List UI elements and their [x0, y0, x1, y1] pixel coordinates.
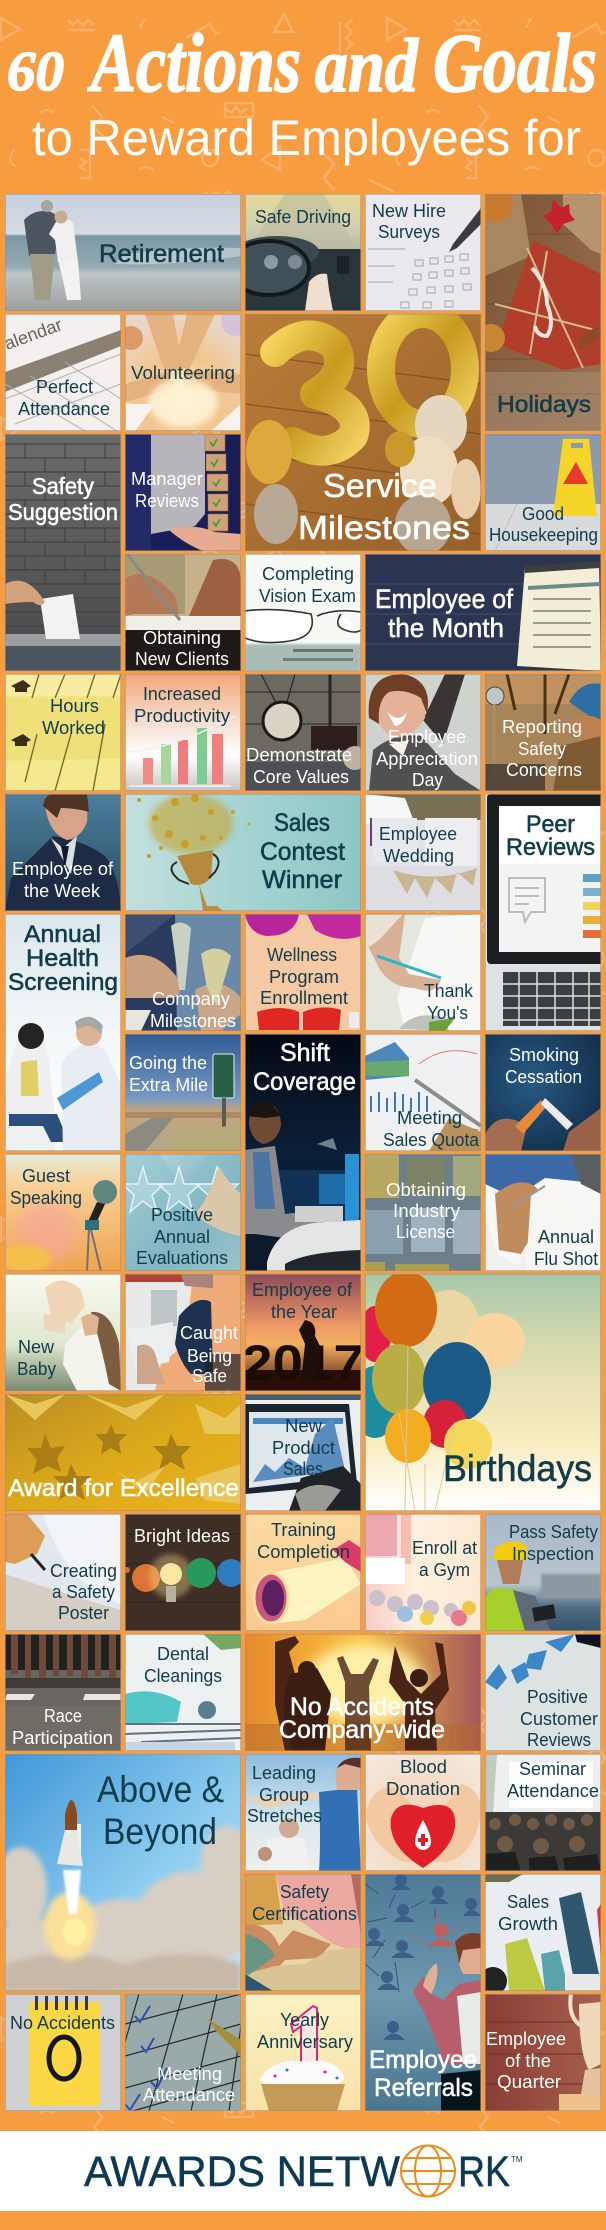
panel: Increased Productivity: Productivity — [134, 705, 231, 726]
panel: Perfect Attendance — [2, 314, 121, 431]
panel: Peer Reviews — [485, 794, 601, 1031]
panel: Completing Vision Exam — [245, 554, 361, 671]
panel: Positive Customer Reviews — [485, 1634, 601, 1751]
panel: Smoking Cessation — [485, 1034, 601, 1151]
panel: Employee of the Quarter: Employee — [486, 2028, 566, 2049]
panel: Meeting Attendance: Meeting — [157, 2063, 222, 2084]
panel: Yearly Anniversary: Anniversary — [257, 2031, 354, 2052]
panel: New Hire Surveys: Surveys — [378, 221, 440, 242]
panel: Annual Flu Shot — [485, 1154, 601, 1271]
panel: Race Participation: Participation — [12, 1727, 113, 1748]
panel: Safety Certifications: Safety — [280, 1881, 330, 1902]
panel: Guest Speaking: Guest — [22, 1165, 70, 1186]
panel: New Baby — [5, 1274, 121, 1391]
panel: Employee Wedding: Employee — [379, 823, 457, 844]
panel: Employee of the Quarter — [485, 1994, 601, 2111]
panel: Dental Cleanings: Dental — [157, 1643, 209, 1664]
panel: Thank You's: Thank — [424, 980, 474, 1001]
panel: Training Completion — [245, 1514, 361, 1631]
panel: Employee of the Month: the Month — [388, 613, 504, 643]
panel: Training Completion: Completion — [257, 1541, 350, 1562]
panel: Employee Appreciation Day — [365, 674, 481, 791]
panel: Sales Contest Winner: Contest — [260, 838, 345, 866]
panel: Employee Wedding: Wedding — [383, 845, 454, 866]
panel: Employee Wedding — [365, 794, 481, 911]
panel: Annual Health Screening: Health — [26, 945, 99, 972]
panel: Employee of the Week: the Week — [24, 880, 101, 901]
panel: Employee Referrals: Employee — [369, 2046, 477, 2074]
panel: Pass Safety Inspection: Pass Safety — [509, 1521, 599, 1542]
panel: Thank You's: You's — [427, 1002, 468, 1023]
panel: Seminar Attendance — [485, 1754, 601, 1871]
panel: Annual Health Screening — [5, 914, 121, 1151]
panel: Award for Excellence — [5, 1394, 241, 1511]
panel: Bright Ideas: Bright Ideas — [134, 1525, 230, 1546]
panel: Enroll at a Gym — [365, 1514, 481, 1631]
panel: Blood Donation — [365, 1754, 481, 1871]
panel: Holidays — [477, 186, 601, 431]
panel: Completing Vision Exam: Vision Exam — [259, 585, 356, 606]
panel: New Baby: Baby — [17, 1358, 57, 1379]
panel: Increased Productivity — [125, 674, 241, 791]
panel: Safe Driving — [229, 194, 361, 311]
panel: Obtaining Industry License: Obtaining — [386, 1179, 466, 1200]
panel: Peer Reviews: Reviews — [506, 834, 595, 861]
panel: Positive Annual Evaluations: Evaluations — [136, 1247, 228, 1268]
panel: Blood Donation: Blood — [400, 1756, 447, 1777]
footer: logo band — [0, 2131, 606, 2211]
panel: Above and Beyond — [0, 1754, 255, 1999]
panel: Caught Being Safe: Caught — [180, 1322, 238, 1343]
panel: Completing Vision Exam: Completing — [262, 563, 354, 584]
panel: Manager Reviews: Manager — [131, 468, 203, 489]
title: script line: Actions — [87, 17, 301, 110]
panel: Shift Coverage: Coverage — [253, 1068, 356, 1096]
panel: Obtaining Industry License: Industry — [393, 1200, 461, 1221]
panel: Creating a Safety Poster: a Safety — [52, 1581, 116, 1602]
panel: Volunteering: Volunteering — [131, 362, 235, 383]
panel: Demonstrate Core Values: Demonstrate — [246, 744, 352, 765]
panel: Positive Customer Reviews: Reviews — [527, 1729, 591, 1750]
panel: Wellness Program Enrollment — [245, 914, 361, 1031]
panel: Race Participation: Race — [44, 1705, 82, 1726]
panel: Sales Growth — [479, 1874, 601, 1995]
panel: Positive Customer Reviews: Positive — [527, 1686, 588, 1707]
panel: Employee of the Quarter: of the — [505, 2050, 551, 2071]
panel: Smoking Cessation: Cessation — [505, 1066, 582, 1087]
panel: New Product Sales — [245, 1394, 361, 1511]
panel: No Accidents — [5, 1994, 121, 2111]
panel: Annual Health Screening: Screening — [8, 969, 118, 996]
panel: New Baby: New — [18, 1336, 55, 1357]
panel: Reporting Safety Concerns: Safety — [518, 738, 567, 759]
panel: Meeting Sales Quota: Meeting — [397, 1107, 462, 1128]
panel: Training Completion: Training — [271, 1519, 336, 1540]
panel: Thank You's — [365, 914, 481, 1031]
panel: Company Milestones: Company — [152, 988, 231, 1009]
panel: Employee of the Month — [365, 554, 601, 671]
panel: Retirement — [5, 194, 241, 311]
panel: Safety Suggestion: Suggestion — [8, 499, 118, 525]
panel: Hours Worked — [5, 674, 121, 791]
panel: Annual Health Screening: Annual — [24, 921, 101, 948]
panel: Perfect Attendance: alendar — [2, 314, 65, 354]
panel: Meeting Attendance: Attendance — [143, 2084, 235, 2105]
panel: Employee Referrals: Referrals — [374, 2074, 473, 2102]
panel: Positive Annual Evaluations: Annual — [154, 1226, 210, 1247]
panel: Safety Certifications: Certifications — [252, 1903, 357, 1924]
panel: Demonstrate Core Values — [245, 674, 367, 791]
panel: Yearly Anniversary: Yearly — [280, 2009, 330, 2030]
panel: Safety Certifications — [245, 1874, 361, 1991]
panel: Caught Being Safe: Safe — [192, 1365, 227, 1386]
panel: Guest Speaking: Speaking — [10, 1187, 82, 1208]
panel: Employee of the Year: Employee of — [252, 1279, 353, 1300]
logo: wordmark: AWARDS NETW — [84, 2148, 400, 2196]
panel: Employee of the Week — [5, 794, 121, 911]
panel: No Accidents: No Accidents — [10, 2012, 115, 2033]
panel: Employee of the Quarter: Quarter — [497, 2071, 561, 2092]
panel: Employee of the Year: the Year — [271, 1301, 337, 1322]
panel: Positive Annual Evaluations: Positive — [151, 1204, 213, 1225]
panel: Leading Group Stretches: Group — [259, 1784, 309, 1805]
panel: Enroll at a Gym: a Gym — [419, 1559, 470, 1580]
panel: Sales Contest Winner: Sales — [274, 809, 330, 837]
panel: Birthdays: Birthdays — [443, 1448, 592, 1489]
panel: Retirement: Retirement — [99, 240, 224, 268]
panel: Positive Annual Evaluations — [122, 1154, 241, 1271]
panel: New Hire Surveys: New Hire — [372, 200, 446, 221]
panel: Volunteering — [119, 308, 249, 431]
panel: Service Milestones: Service — [323, 467, 437, 504]
panel: Obtaining New Clients: Obtaining — [143, 627, 221, 648]
panel: Race Participation — [5, 1634, 121, 1751]
panel: Employee Referrals — [365, 1874, 481, 2111]
panel: Obtaining New Clients — [125, 554, 241, 671]
panel: Above and Beyond: Beyond — [103, 1811, 217, 1852]
panel: Meeting Sales Quota — [365, 1034, 481, 1151]
panel: Sales Growth: Sales — [507, 1891, 549, 1912]
panel: Creating a Safety Poster: Creating — [50, 1560, 117, 1581]
panel: Dental Cleanings: Cleanings — [144, 1665, 222, 1686]
panel: Sales Contest Winner: Winner — [262, 866, 342, 894]
panel: Manager Reviews — [125, 434, 241, 551]
panel: Employee of the Year: 2017 — [242, 1335, 364, 1391]
panel: Leading Group Stretches — [245, 1754, 361, 1871]
panel: Reporting Safety Concerns: Concerns — [506, 759, 582, 780]
panel: Shift Coverage — [245, 1034, 361, 1271]
panel: Hours Worked: Hours — [50, 695, 99, 716]
panel: Annual Flu Shot: Annual — [538, 1226, 594, 1247]
panel: Blood Donation: Donation — [386, 1778, 460, 1799]
panel: Creating a Safety Poster: Poster — [58, 1602, 109, 1623]
panel: Peer Reviews: Peer — [526, 811, 575, 838]
panel: Going the Extra Mile: Going the — [129, 1052, 207, 1073]
panel: Meeting Sales Quota: Sales Quota — [383, 1129, 480, 1150]
panel: Employee Appreciation Day: Appreciation — [376, 748, 478, 769]
panel: Leading Group Stretches: Leading — [252, 1762, 316, 1783]
panel: Dental Cleanings — [125, 1634, 241, 1751]
panel: Wellness Program Enrollment: Enrollment — [260, 987, 348, 1008]
panel: Holidays: Holidays — [497, 391, 591, 417]
panel: Wellness Program Enrollment: Program — [269, 966, 339, 987]
panel: Sales Contest Winner — [125, 794, 361, 911]
title: second line: to Reward Employees for — [32, 110, 581, 166]
panel: Smoking Cessation: Smoking — [509, 1044, 579, 1065]
panel: Yearly Anniversary — [245, 1994, 361, 2111]
panel: Pass Safety Inspection — [485, 1514, 601, 1631]
panel: No Accidents Company-wide: Company-wide — [279, 1716, 445, 1744]
panel: Increased Productivity: Increased — [143, 683, 221, 704]
panel: Employee Appreciation Day: Employee — [388, 726, 466, 747]
panel: Guest Speaking — [0, 1154, 121, 1273]
panel: No Accidents Company-wide — [245, 1634, 481, 1751]
panel: Hours Worked: Worked — [42, 717, 105, 738]
panel: Wellness Program Enrollment: Wellness — [267, 944, 337, 965]
panel: Safety Suggestion: Safety — [32, 473, 94, 499]
panel: Annual Flu Shot: Flu Shot — [534, 1248, 598, 1269]
panel: Caught Being Safe: Being — [187, 1345, 232, 1366]
balloon numeral 3 — [275, 335, 355, 451]
panel: Employee of the Month: Employee of — [375, 584, 513, 614]
panel: Pass Safety Inspection: Inspection — [512, 1543, 594, 1564]
panel: Company Milestones: Milestones — [150, 1010, 236, 1031]
panel: Good Housekeeping: Housekeeping — [489, 524, 598, 545]
panel: Good Housekeeping: Good — [522, 503, 564, 524]
panel: Safe Driving: Safe Driving — [255, 206, 351, 227]
panel: Service Milestones: Milestones — [298, 509, 470, 546]
panel: Going the Extra Mile: Extra Mile — [129, 1074, 208, 1095]
title — [7, 17, 597, 166]
panel: Company Milestones — [125, 914, 241, 1031]
panel: New Hire Surveys — [365, 194, 481, 311]
panel: Above and Beyond: Above & — [97, 1769, 224, 1810]
panel: Going the Extra Mile — [125, 1034, 241, 1151]
panel: Seminar Attendance: Attendance — [507, 1780, 599, 1801]
panel: New Product Sales: Sales — [283, 1458, 323, 1479]
panel: Employee of the Week: Employee of — [12, 858, 114, 879]
panel: Obtaining Industry License: License — [396, 1221, 455, 1242]
icon: globe — [401, 2146, 455, 2196]
panel: Positive Customer Reviews: Customer — [520, 1708, 598, 1729]
logo: wordmark end: RK — [458, 2148, 510, 2196]
title: script line — [7, 17, 597, 110]
panel: Seminar Attendance: Seminar — [519, 1758, 586, 1779]
panel: Obtaining Industry License — [365, 1154, 481, 1271]
panel: Demonstrate Core Values: Core Values — [253, 766, 349, 787]
title: script line: 60 — [7, 41, 64, 103]
panel: Bright Ideas — [124, 1514, 245, 1631]
panel: Shift Coverage: Shift — [280, 1039, 330, 1067]
panel: Reporting Safety Concerns — [485, 674, 601, 791]
panel: Service Milestones — [245, 314, 481, 555]
panel: Enroll at a Gym: Enroll at — [412, 1537, 477, 1558]
panel: Caught Being Safe — [125, 1274, 241, 1391]
panel: Leading Group Stretches: Stretches — [247, 1805, 322, 1826]
panel: Sales Growth: Growth — [498, 1913, 558, 1934]
panel: New Product Sales: Product — [272, 1437, 335, 1458]
panel: Perfect Attendance: Perfect — [36, 376, 93, 397]
title: script line: and — [315, 24, 419, 108]
panel: Meeting Attendance — [125, 1994, 241, 2111]
logo: trademark: TM — [511, 2155, 523, 2164]
panel: Obtaining New Clients: New Clients — [135, 648, 229, 669]
panel: Award for Excellence: Award for Excellence — [8, 1475, 239, 1502]
panel: Manager Reviews: Reviews — [135, 490, 199, 511]
panel: No Accidents Company-wide: No Accidents — [290, 1693, 434, 1721]
panel: Good Housekeeping — [485, 434, 601, 551]
panel: Reporting Safety Concerns: Reporting — [502, 716, 582, 737]
panel: Perfect Attendance: Attendance — [18, 398, 110, 419]
panel: Birthdays — [351, 1271, 601, 1511]
panel: Creating a Safety Poster — [5, 1514, 121, 1631]
panel: Employee Appreciation Day: Day — [412, 769, 444, 790]
panel: Safety Suggestion — [5, 434, 121, 671]
panel: New Product Sales: New — [285, 1415, 323, 1436]
panel: Employee of the Year — [242, 1274, 364, 1391]
